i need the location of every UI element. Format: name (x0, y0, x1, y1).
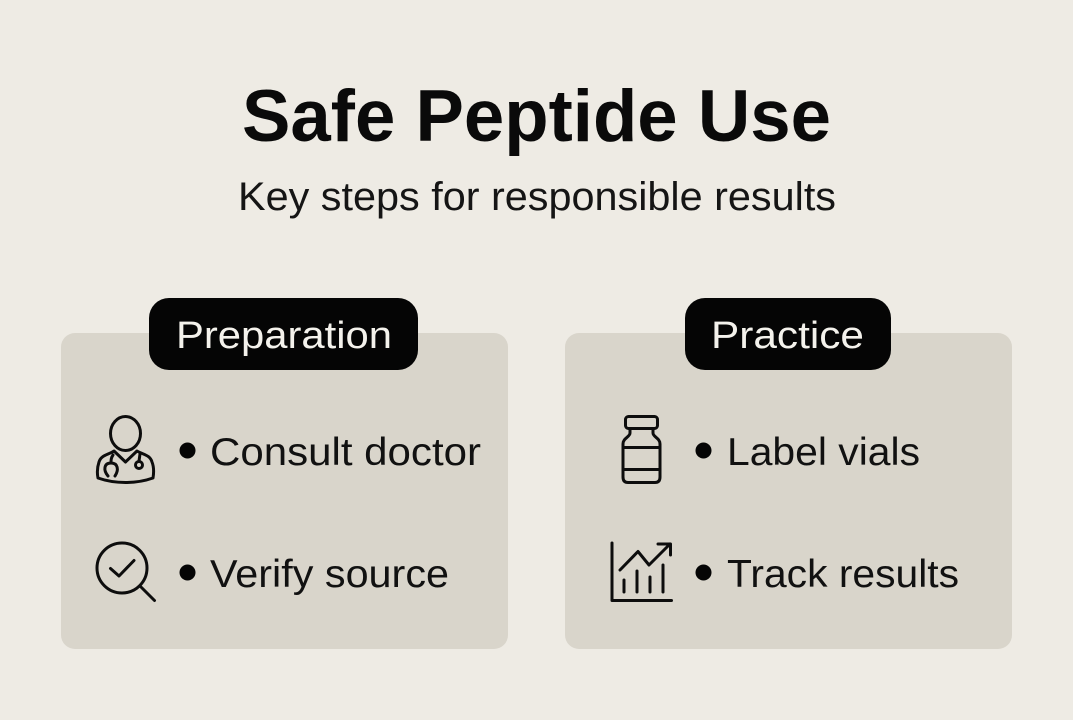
heading: practice: Practice (711, 315, 864, 357)
bullet: label vials (696, 442, 712, 458)
heading: preparation (149, 298, 418, 370)
text: consult doctor: Consult doctor (210, 431, 481, 474)
text: label vials: Label vials (727, 431, 920, 474)
icon: growth chart (612, 543, 672, 600)
bullet: consult doctor (180, 442, 196, 458)
bullet: verify source (180, 564, 196, 580)
text: verify source: Verify source (210, 553, 449, 596)
panel: practice (565, 298, 1012, 649)
icon: magnifier with check (97, 543, 154, 600)
title: Safe Peptide Use (242, 76, 831, 157)
bullet: track results (696, 564, 712, 580)
heading: practice (685, 298, 891, 370)
panel: preparation (61, 298, 508, 649)
subtitle: Key steps for responsible results (238, 175, 836, 219)
text: track results: Track results (727, 553, 959, 596)
heading: preparation: Preparation (176, 315, 392, 357)
icon: vial (623, 416, 660, 482)
icon: doctor (97, 416, 154, 482)
